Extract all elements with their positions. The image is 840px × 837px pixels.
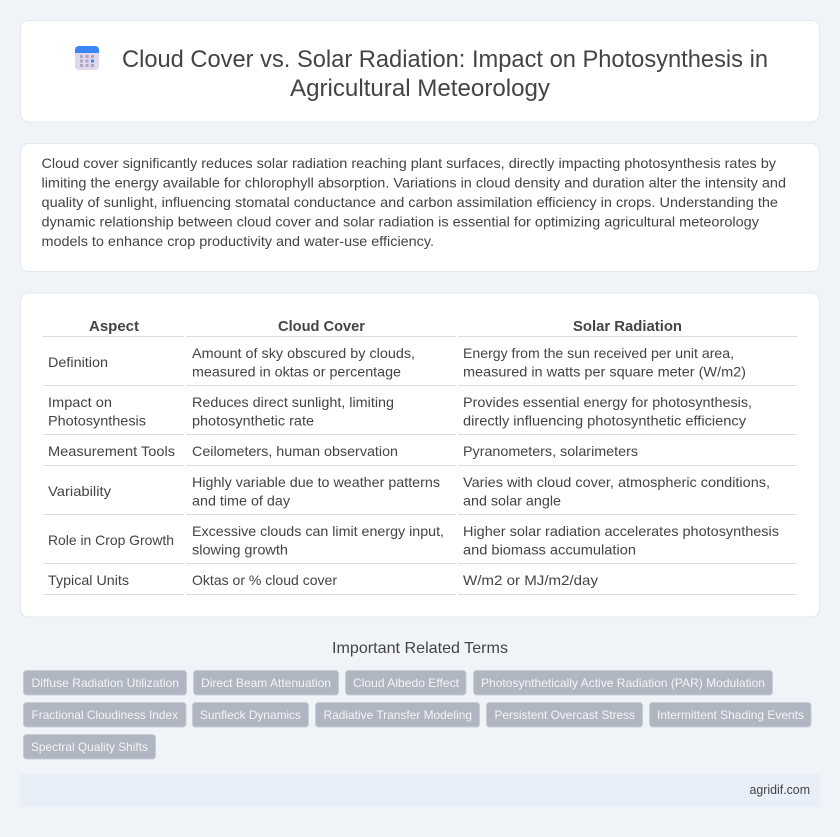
- tag: Persistent Overcast Stress: [494, 708, 635, 722]
- tag: Sunfleck Dynamics: [200, 708, 301, 722]
- row: variability: Varies with cloud cover, atmospheric conditions,: [463, 474, 770, 490]
- panel: related term tags: [24, 670, 811, 759]
- tag: [24, 702, 186, 727]
- row: role in crop growth: and biomass accumulation: [463, 542, 636, 558]
- row: variability: [48, 474, 770, 508]
- table header: Solar Radiation: [573, 318, 682, 335]
- row: role in crop growth: [48, 523, 779, 558]
- row: variability: and time of day: [192, 492, 290, 508]
- tag: [486, 702, 642, 727]
- text block: intro: limiting the energy available for chlorophyll absorption. Variations in cloud density and duration alter the intensity and: [42, 174, 786, 190]
- title: Agricultural Meteorology: [290, 75, 550, 102]
- row: impact on photosynthesis: [48, 394, 752, 428]
- tag: Radiative Transfer Modeling: [324, 708, 472, 722]
- tag: Spectral Quality Shifts: [31, 740, 148, 754]
- tag: [346, 670, 466, 695]
- row: variability: and solar angle: [463, 492, 561, 508]
- tag: [650, 702, 811, 727]
- row: impact on photosynthesis: photosynthetic rate: [192, 412, 314, 428]
- table header: [89, 318, 682, 335]
- tag: Cloud Albedo Effect: [353, 676, 460, 690]
- row: definition: Energy from the sun received per unit area,: [463, 345, 734, 361]
- tag: Diffuse Radiation Utilization: [32, 676, 179, 690]
- title: [122, 46, 768, 102]
- tag: [194, 670, 338, 695]
- tag: Photosynthetically Active Radiation (PAR) Modulation: [481, 676, 765, 690]
- row: definition: measured in oktas or percentage: [192, 364, 401, 380]
- row: impact on photosynthesis: Impact on: [48, 394, 112, 410]
- row: role in crop growth: Excessive clouds can limit energy input,: [192, 523, 444, 539]
- row: definition: Amount of sky obscured by clouds,: [192, 345, 415, 361]
- tag: Fractional Cloudiness Index: [32, 708, 178, 722]
- row: definition: Definition: [48, 354, 108, 370]
- row: measurement tools: Measurement Tools: [48, 443, 175, 459]
- text block: intro: Cloud cover significantly reduces solar radiation reaching plant surfaces, directly impacting photosynthesis rates by: [42, 155, 776, 171]
- row: measurement tools: Pyranometers, solarimeters: [463, 443, 638, 459]
- panel: header: [20, 20, 820, 122]
- row: variability: Highly variable due to weather patterns: [192, 474, 440, 490]
- row: role in crop growth: Role in Crop Growth: [48, 532, 174, 548]
- table header: Cloud Cover: [278, 318, 365, 335]
- tag: [316, 702, 480, 727]
- table header: Aspect: [89, 318, 139, 335]
- row: role in crop growth: slowing growth: [192, 542, 288, 558]
- text block: intro: dynamic relationship between cloud cover and solar radiation is essential for optimizing agricultural meteorology: [42, 214, 759, 230]
- row: variability: Variability: [48, 483, 111, 499]
- row: typical units: Oktas or % cloud cover: [192, 572, 337, 588]
- tag: Intermittent Shading Events: [657, 708, 804, 722]
- footer site name: agridif.com: [750, 783, 810, 797]
- row: definition: [48, 345, 746, 380]
- row: typical units: Typical Units: [48, 572, 129, 588]
- tag: [192, 702, 308, 727]
- row: impact on photosynthesis: Reduces direct sunlight, limiting: [192, 394, 394, 410]
- icon: calendar: [75, 46, 99, 70]
- tag: Direct Beam Attenuation: [201, 676, 331, 690]
- tag: [474, 670, 772, 695]
- row: typical units: W/m2 or MJ/m2/day: [463, 572, 598, 588]
- tag: [24, 734, 156, 759]
- row: impact on photosynthesis: directly influencing photosynthetic efficiency: [463, 412, 746, 428]
- text block: intro: [42, 155, 786, 249]
- row: role in crop growth: Higher solar radiation accelerates photosynthesis: [463, 523, 779, 539]
- text block: intro: models to enhance crop productivity and water-use efficiency.: [42, 233, 434, 249]
- row: impact on photosynthesis: Provides essential energy for photosynthesis,: [463, 394, 752, 410]
- heading: related terms: Important Related Terms: [332, 640, 508, 657]
- panel: intro paragraph: [20, 144, 820, 272]
- row: measurement tools: Ceilometers, human observation: [192, 443, 398, 459]
- row: measurement tools: [48, 443, 638, 459]
- footer bar: [20, 774, 820, 807]
- row: impact on photosynthesis: Photosynthesis: [48, 412, 146, 428]
- row: definition: measured in watts per square meter (W/m2): [463, 364, 746, 380]
- text block: intro: quality of sunlight, influencing stomatal conductance and carbon assimilation efficiency in crops. Understanding the: [42, 194, 778, 210]
- tag: [24, 670, 186, 695]
- row: typical units: [48, 572, 598, 588]
- panel: comparison table: [20, 293, 820, 617]
- title: Cloud Cover vs. Solar Radiation: Impact on Photosynthesis in: [122, 46, 768, 73]
